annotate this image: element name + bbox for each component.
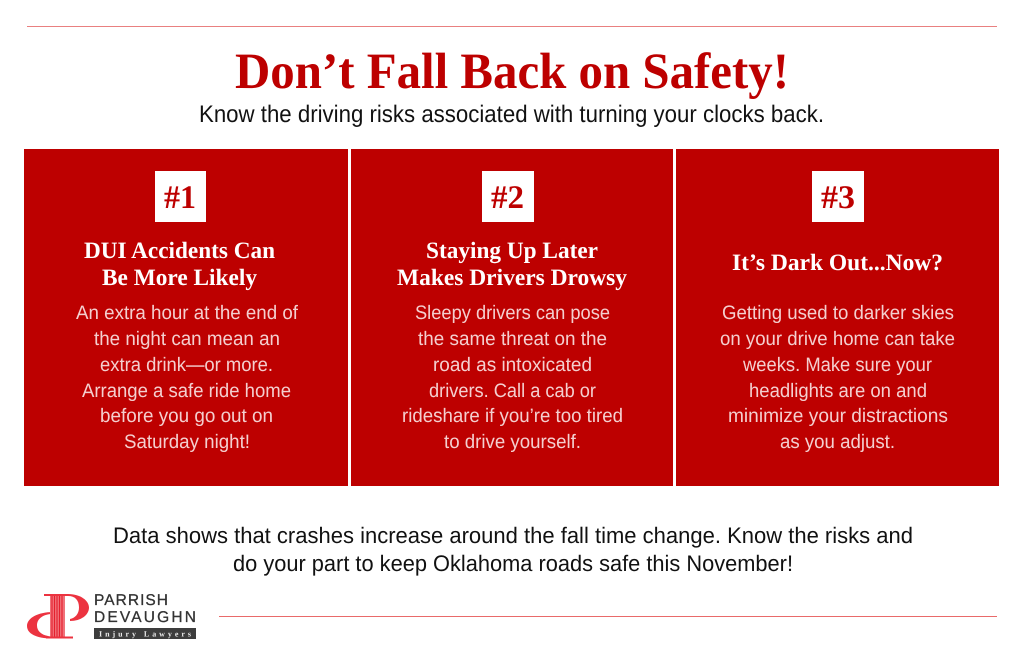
body text: darkness: weeks. Make sure your [742,354,932,376]
logo mark: column monogram [27,594,89,638]
subtitle: Know the driving risks associated with turning your clocks back. [199,101,824,128]
logo tagline bar: Injury Lawyers [99,630,191,638]
body text: drowsy drivers: to drive yourself. [444,431,581,453]
title: Don’t Fall Back on Safety! [235,44,789,100]
logo wordmark: DEVAUGHN [94,609,196,626]
body text: drowsy drivers: the same threat on the [418,328,607,350]
number badge 2: #2 [491,180,524,216]
heading: DUI accidents: Be More Likely [102,265,257,291]
body text: drowsy drivers: Sleepy drivers can pose [415,302,610,324]
panel: DUI accidents [24,149,348,486]
body text: darkness: Getting used to darker skies [722,302,954,324]
heading: DUI accidents: DUI Accidents Can [84,238,275,264]
number badge 3: #3 [821,180,855,216]
body text: drowsy drivers: drivers. Call a cab or [429,380,596,402]
body text: DUI accidents: Arrange a safe ride home [82,380,291,402]
body text: darkness: minimize your distractions [728,405,948,427]
heading: DUI accidents [84,238,275,291]
body text: darkness: on your drive home can take [720,328,955,350]
logo: Parrish Devaughn [27,592,196,639]
heading: drowsy drivers: Makes Drivers Drowsy [397,265,627,291]
number badge 1 [155,171,206,222]
heading: drowsy drivers: Staying Up Later [426,238,598,264]
closing message: do your part to keep Oklahoma roads safe this November! [233,551,793,576]
heading: drowsy drivers [397,238,627,291]
body text: drowsy drivers: road as intoxicated [433,354,592,376]
panel: darkness [676,149,999,486]
panel: drowsy drivers [351,149,673,486]
body text: DUI accidents: Saturday night! [124,431,250,453]
body text: darkness [720,302,955,453]
number badge 3 [812,171,864,222]
body text: darkness: as you adjust. [780,431,895,453]
body text: DUI accidents: before you go out on [100,405,273,427]
closing message: Data shows that crashes increase around the fall time change. Know the risks and [113,523,913,548]
number badge 2 [482,171,534,222]
closing message [113,523,913,576]
body text: darkness: headlights are on and [749,380,927,402]
logo wordmark: PARRISH [94,592,168,609]
number badge 1: #1 [164,180,196,216]
body text: DUI accidents: extra drink—or more. [100,354,273,376]
heading: darkness: It’s Dark Out...Now? [732,250,943,276]
body text: drowsy drivers [402,302,623,453]
body text: DUI accidents: An extra hour at the end of [76,302,299,324]
body text: DUI accidents [76,302,299,453]
body text: DUI accidents: the night can mean an [94,328,280,350]
logo wordmark [94,592,196,626]
body text: drowsy drivers: rideshare if you’re too tired [402,405,623,427]
